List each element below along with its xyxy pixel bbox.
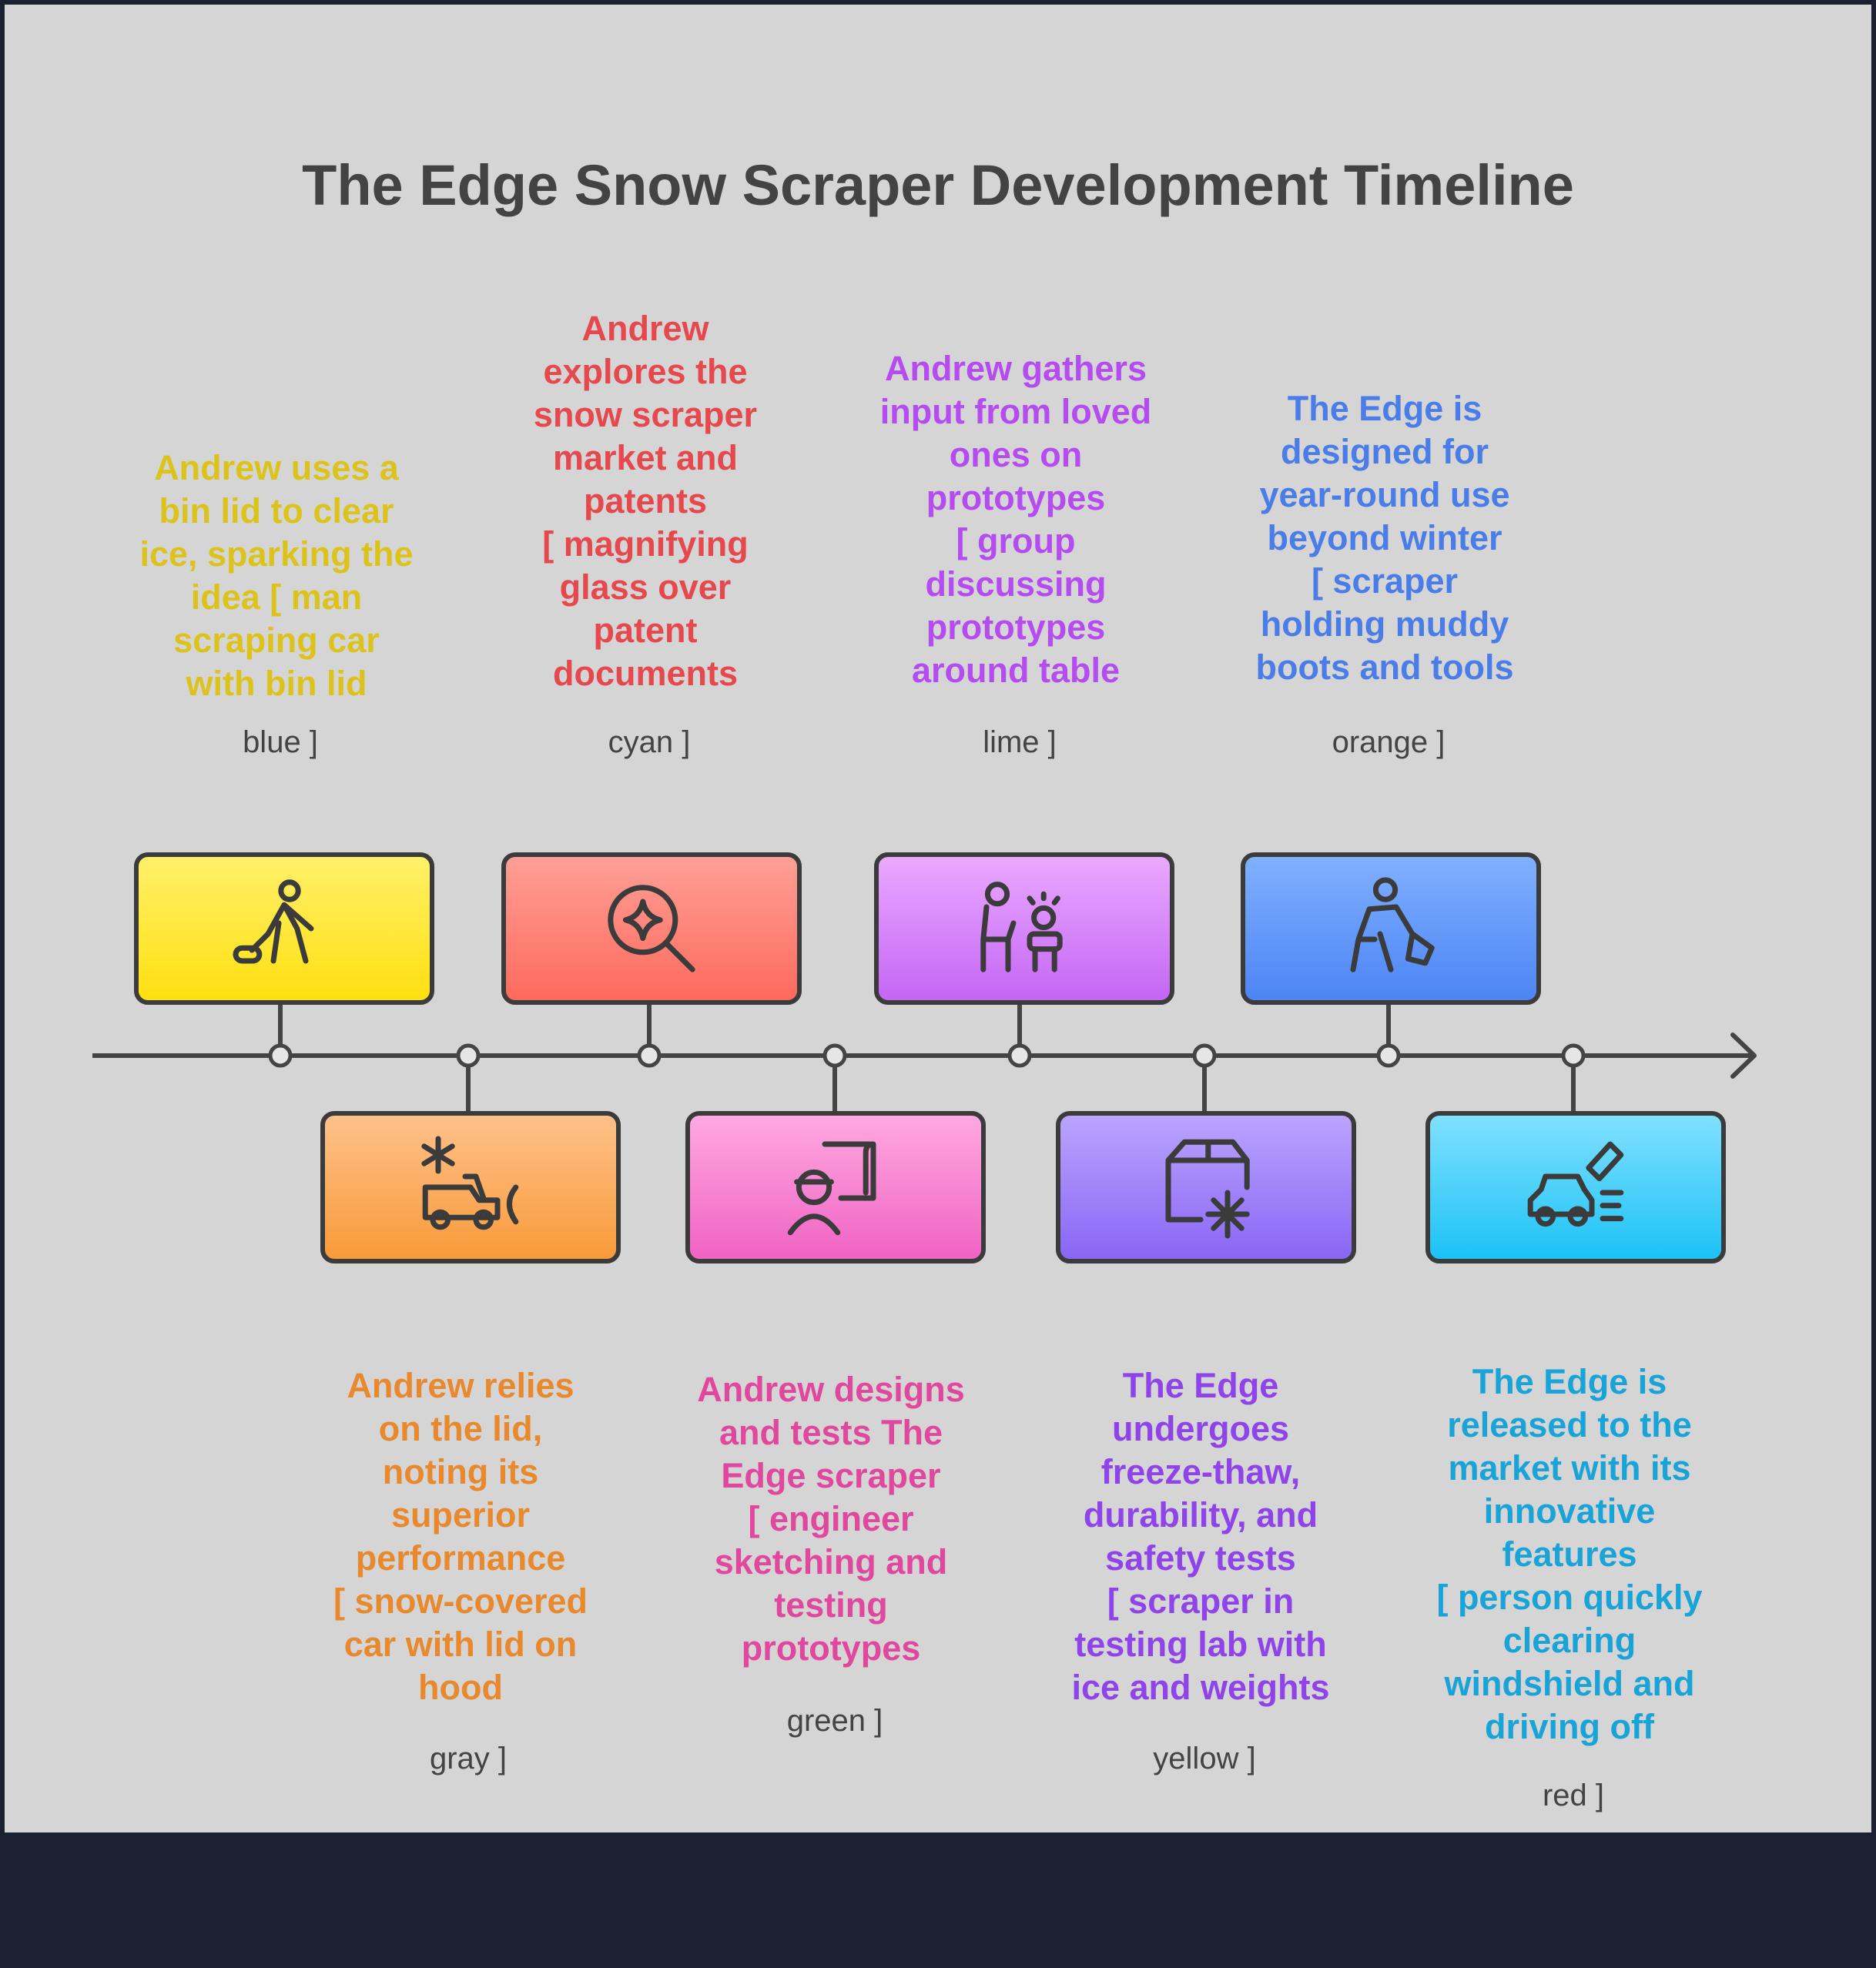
- title: The Edge Snow Scraper Development Timeline: [302, 153, 1574, 217]
- text: step 8: [1436, 1362, 1703, 1746]
- text: step 3: around table: [912, 651, 1120, 690]
- text: step 8: innovative: [1484, 1491, 1655, 1531]
- text: step 4: [1255, 389, 1513, 687]
- text: step 5: [ snow-covered: [333, 1581, 588, 1621]
- text: step 3: prototypes: [926, 607, 1105, 647]
- text: step 8: released to the: [1447, 1405, 1692, 1444]
- text: step 7: ice and weights: [1071, 1668, 1330, 1707]
- text: step 3: Andrew gathers: [885, 349, 1147, 388]
- text: step 4: [ scraper: [1312, 561, 1458, 601]
- text: step 8: driving off: [1485, 1707, 1654, 1746]
- tag: red: red ]: [1543, 1779, 1604, 1812]
- text: step 6: Andrew designs: [697, 1370, 965, 1409]
- text: step 6: and tests The: [719, 1413, 943, 1452]
- text: step 2: glass over: [560, 567, 731, 607]
- text: step 8: features: [1502, 1535, 1637, 1574]
- box: yellow: [134, 852, 434, 1005]
- text: step 4: holding muddy: [1261, 604, 1509, 644]
- text: step 5: superior: [391, 1495, 530, 1535]
- text: step 2: [534, 309, 757, 693]
- text: step 5: hood: [418, 1668, 503, 1707]
- text: step 1: Andrew uses a: [154, 448, 399, 487]
- box: purple: [874, 852, 1174, 1005]
- text: step 1: [139, 448, 414, 703]
- text: step 2: explores the: [543, 352, 748, 391]
- text: step 7: freeze-thaw,: [1101, 1452, 1300, 1491]
- text: step 6: [ engineer: [748, 1499, 914, 1538]
- text: step 6: Edge scraper: [721, 1456, 941, 1495]
- text: step 3: input from loved: [880, 392, 1151, 431]
- tag: orange: orange ]: [1332, 725, 1445, 759]
- text: step 7: safety tests: [1105, 1538, 1296, 1578]
- text: step 2: documents: [553, 654, 738, 693]
- text: step 7: undergoes: [1112, 1409, 1289, 1448]
- text: step 3: ones on: [950, 435, 1082, 474]
- text: step 4: The Edge is: [1288, 389, 1482, 428]
- text: step 5: on the lid,: [379, 1409, 542, 1448]
- text: step 3: prototypes: [926, 478, 1105, 517]
- tag: gray: gray ]: [430, 1742, 507, 1776]
- text: step 2: patent: [593, 611, 698, 650]
- box: violet: [1056, 1111, 1356, 1263]
- text: step 3: [ group: [956, 521, 1075, 561]
- text: step 8: market with its: [1448, 1448, 1691, 1488]
- text: step 2: [ magnifying: [542, 524, 749, 564]
- box: pink: [685, 1111, 986, 1263]
- text: step 2: snow scraper: [534, 395, 757, 434]
- text: step 7: [1071, 1366, 1330, 1707]
- text: step 3: [880, 349, 1151, 690]
- text: step 7: The Edge: [1123, 1366, 1278, 1405]
- text: step 4: boots and tools: [1255, 648, 1513, 687]
- text: step 1: ice, sparking the: [139, 534, 414, 574]
- text: step 5: Andrew relies: [347, 1366, 575, 1405]
- tag: yellow: yellow ]: [1153, 1742, 1256, 1776]
- text: step 4: beyond winter: [1267, 518, 1502, 557]
- text: step 6: [697, 1370, 965, 1668]
- tag: cyan: cyan ]: [608, 725, 690, 759]
- text: step 4: year-round use: [1259, 475, 1510, 514]
- text: step 5: performance: [356, 1538, 565, 1578]
- box: orange: [320, 1111, 621, 1263]
- tag: green: green ]: [787, 1704, 883, 1738]
- text: step 7: [ scraper in: [1107, 1581, 1294, 1621]
- text: step 1: idea [ man: [191, 577, 362, 617]
- text: step 8: [ person quickly: [1436, 1578, 1703, 1617]
- text: step 4: designed for: [1281, 432, 1489, 471]
- text: step 6: testing: [774, 1585, 888, 1625]
- box: red: [501, 852, 802, 1005]
- text: step 5: noting its: [383, 1452, 538, 1491]
- text: step 2: Andrew: [581, 309, 709, 348]
- box: blue: [1241, 852, 1541, 1005]
- text: step 8: windshield and: [1444, 1664, 1695, 1703]
- text: step 5: car with lid on: [344, 1625, 577, 1664]
- text: step 1: scraping car: [173, 621, 380, 660]
- text: step 2: patents: [584, 481, 707, 520]
- text: step 5: [333, 1366, 588, 1707]
- text: step 2: market and: [553, 438, 738, 477]
- text: step 7: testing lab with: [1074, 1625, 1327, 1664]
- text: step 7: durability, and: [1084, 1495, 1318, 1535]
- tag: lime: lime ]: [983, 725, 1057, 759]
- text: step 8: The Edge is: [1472, 1362, 1667, 1401]
- text: step 3: discussing: [925, 564, 1107, 604]
- text: step 1: bin lid to clear: [159, 491, 394, 530]
- box: cyan: [1425, 1111, 1726, 1263]
- text: step 6: sketching and: [715, 1542, 947, 1581]
- text: step 1: with bin lid: [186, 664, 367, 703]
- tag: blue: blue ]: [243, 725, 318, 759]
- text: step 6: prototypes: [742, 1628, 920, 1668]
- text: step 8: clearing: [1503, 1621, 1636, 1660]
